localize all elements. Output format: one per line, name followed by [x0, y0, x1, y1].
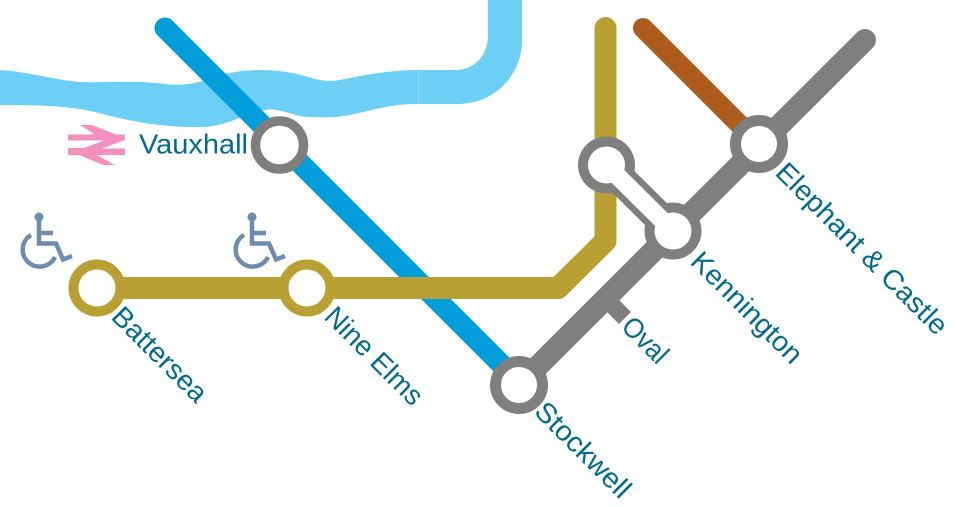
icon: wheelchair Battersea	[23, 212, 72, 267]
tick: Oval	[600, 293, 625, 318]
river	[0, 0, 522, 127]
line: Northern (grey)	[519, 40, 865, 385]
label: Oval: Oval	[616, 310, 675, 370]
label: Battersea: Battersea	[106, 300, 214, 409]
line: Northern extension (gold)	[97, 28, 606, 288]
label: Kennington: Kennington	[685, 245, 809, 370]
station: Kennington interchange	[578, 136, 702, 260]
station: Stockwell	[496, 362, 542, 408]
line: Bakerloo (brown)	[643, 28, 750, 135]
label: Stockwell: Stockwell	[529, 395, 638, 504]
line: Victoria (blue)	[165, 28, 515, 378]
station: Battersea	[74, 264, 120, 312]
icon: wheelchair Nine Elms	[236, 212, 285, 267]
label: Vauxhall: Vauxhall	[139, 128, 248, 160]
station: Vauxhall	[256, 121, 304, 169]
station: Nine Elms	[284, 264, 330, 312]
icon: national rail	[68, 125, 125, 165]
station: Elephant and Castle	[736, 120, 782, 168]
label: Nine Elms: Nine Elms	[319, 300, 430, 411]
label: Elephant and Castle: Elephant & Castle	[770, 156, 954, 341]
